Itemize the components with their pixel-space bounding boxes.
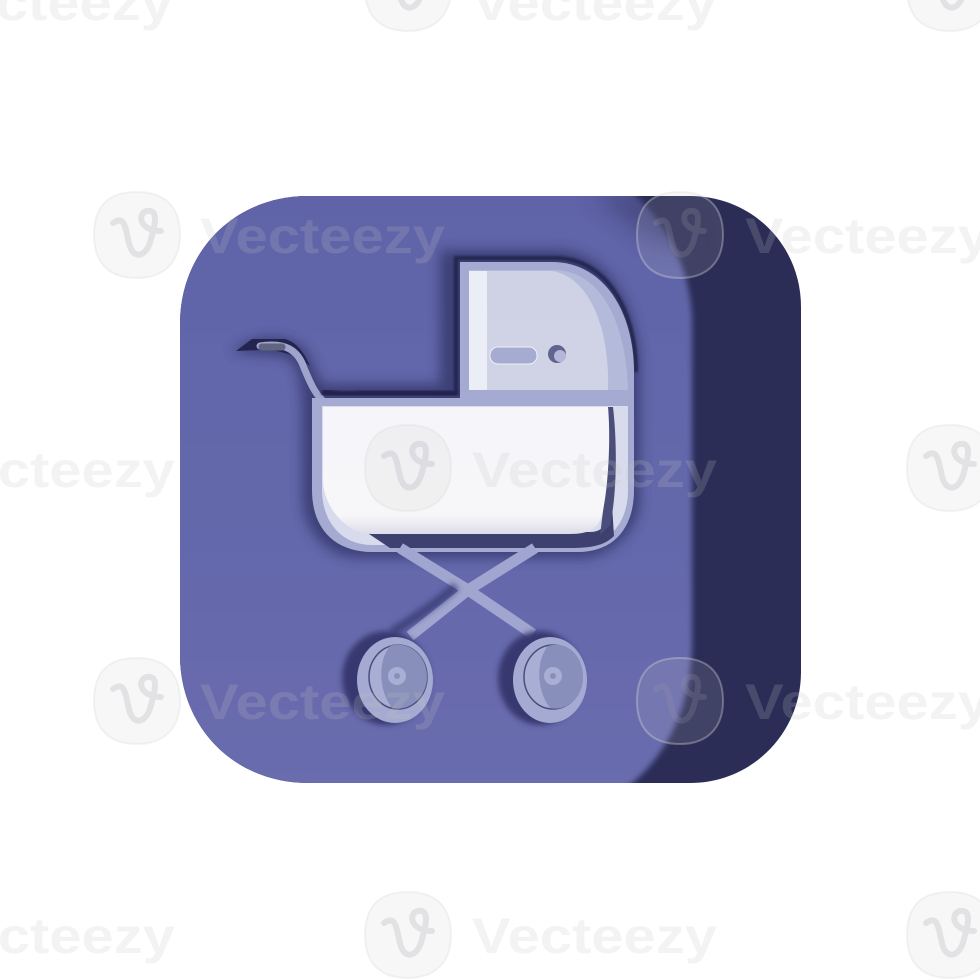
hood dot [548, 345, 566, 363]
basket frame [312, 398, 634, 552]
handle [260, 345, 322, 400]
hood strip [469, 271, 488, 390]
hood slot [490, 347, 537, 364]
tile dark side [180, 196, 801, 783]
watermark text: Vecteezy [745, 208, 980, 264]
watermark text: Vecteezy [472, 442, 717, 498]
hood frame [460, 262, 634, 400]
tile front face [170, 186, 700, 793]
handle grip [262, 344, 282, 350]
watermark text: Vecteezy [472, 908, 717, 964]
top rail dark shadow [322, 391, 458, 395]
watermark text: Vecteezy [200, 208, 445, 264]
basket inner [322, 406, 628, 545]
right wheel [498, 631, 587, 725]
hood panel [487, 271, 608, 390]
icon tile [170, 186, 801, 793]
handle shadow [236, 339, 310, 366]
hood recess dark line [456, 258, 636, 392]
stroller legs [400, 548, 535, 636]
stroller icon [232, 250, 640, 725]
leg shadow [392, 586, 456, 632]
hood light band [469, 270, 628, 390]
basket body [323, 407, 609, 534]
left wheel [342, 631, 433, 725]
watermark text: Vecteezy [745, 674, 980, 730]
recess shadow [232, 250, 640, 558]
watermark text: Vecteezy [200, 674, 445, 730]
basket right shadow [600, 407, 616, 535]
basket bottom shadow [366, 505, 614, 548]
hood dot highlight [554, 350, 566, 362]
